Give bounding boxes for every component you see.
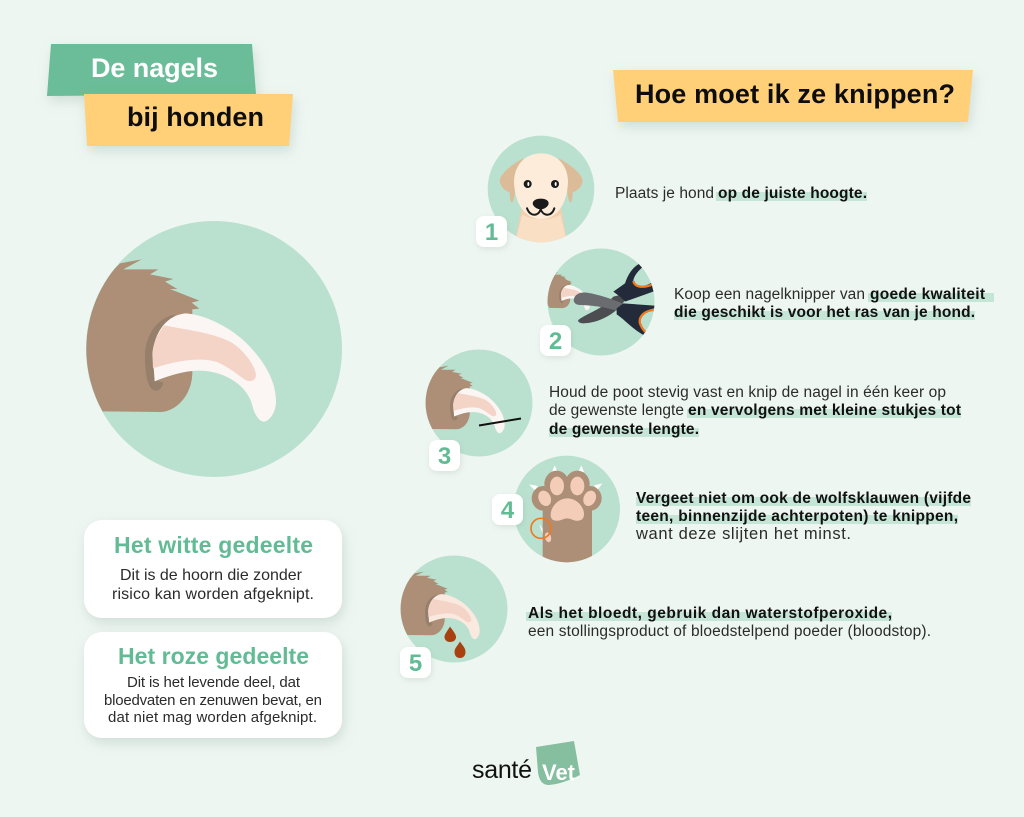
step 3 illustration: nail with cut line bbox=[423, 350, 532, 456]
step 2 text: die geschikt is voor het ras van je hond. bbox=[674, 304, 975, 321]
card: Het witte gedeelte: Dit is de hoorn die zonder bbox=[120, 567, 303, 584]
step 5 text: Als het bloedt, gebruik dan waterstofperoxide, bbox=[528, 605, 892, 622]
card: Het roze gedeelte bbox=[84, 632, 342, 738]
badge 5 bbox=[400, 647, 431, 678]
badge 2: 2 bbox=[549, 328, 562, 355]
step 3 text: Houd de poot stevig vast en knip de nagel in één keer op bbox=[549, 384, 946, 401]
step 4 text: Vergeet niet om ook de wolfsklauwen (vijfde bbox=[636, 490, 971, 507]
logo: santévet bbox=[472, 741, 580, 785]
step 4 text: want deze slijten het minst. bbox=[635, 525, 851, 543]
title: De nagels bij honden bbox=[47, 44, 293, 146]
badge 3: 3 bbox=[438, 443, 451, 470]
step 3 text: en vervolgens met kleine stukjes tot bbox=[688, 402, 961, 419]
step 2 text: Koop een nagelknipper van bbox=[674, 286, 865, 303]
step 4 illustration: paw with dewclaw bbox=[513, 456, 620, 567]
badge 5: 5 bbox=[409, 650, 422, 677]
card: Het roze gedeelte: bloedvaten en zenuwen bevat, en bbox=[104, 692, 322, 709]
title ribbon: bij honden: bij honden bbox=[127, 102, 264, 132]
card: Het witte gedeelte bbox=[84, 520, 342, 618]
step 2 illustration: nail clipper bbox=[544, 248, 655, 356]
step 2 text bbox=[674, 286, 994, 321]
badge 2 bbox=[540, 325, 571, 356]
card: Het roze gedeelte: dat niet mag worden afgeknipt. bbox=[108, 709, 317, 726]
heading: Hoe moet ik ze knippen?: Hoe moet ik ze knippen? bbox=[635, 79, 955, 109]
icon: scissors bbox=[574, 263, 655, 335]
step 3 text: de gewenste lengte bbox=[549, 402, 684, 419]
icon: blood drops bbox=[444, 626, 466, 658]
title ribbon: De nagels bbox=[47, 44, 256, 96]
card: Het roze gedeelte: Het roze gedeelte bbox=[118, 643, 309, 669]
card: Het roze gedeelte: Dit is het levende deel, dat bbox=[127, 674, 301, 691]
logo: santévet: Vet bbox=[542, 760, 576, 785]
step 1 text: Plaats je hond bbox=[615, 185, 714, 202]
badge 3 bbox=[429, 440, 460, 471]
illustration: large nail bbox=[80, 221, 342, 477]
card: Het witte gedeelte: Het witte gedeelte bbox=[114, 532, 313, 558]
step 3 text: de gewenste lengte. bbox=[549, 421, 699, 438]
step 5 illustration: bleeding nail bbox=[398, 556, 508, 662]
badge 4 bbox=[492, 494, 523, 525]
step 1 text: op de juiste hoogte. bbox=[718, 185, 867, 202]
badge 1: 1 bbox=[485, 219, 498, 246]
heading: Hoe moet ik ze knippen? bbox=[613, 70, 973, 122]
card: Het witte gedeelte: risico kan worden afgeknipt. bbox=[112, 586, 314, 603]
cut line bbox=[479, 418, 521, 426]
step 2 text: goede kwaliteit bbox=[870, 286, 985, 303]
step 1 text bbox=[615, 185, 867, 202]
title ribbon: De nagels: De nagels bbox=[91, 53, 218, 83]
step 5 text: een stollingsproduct of bloedstelpend poeder (bloodstop). bbox=[528, 623, 931, 640]
badge 1 bbox=[476, 216, 507, 247]
title ribbon: bij honden bbox=[84, 94, 293, 146]
step 3 text bbox=[549, 384, 961, 438]
step 4 text bbox=[635, 490, 971, 543]
badge 4: 4 bbox=[501, 497, 515, 524]
step 1 illustration: dog bbox=[488, 136, 594, 245]
step 5 text bbox=[526, 605, 931, 640]
logo: santévet: santé bbox=[472, 756, 532, 784]
step 4 text: teen, binnenzijde achterpoten) te knippen, bbox=[636, 508, 958, 525]
